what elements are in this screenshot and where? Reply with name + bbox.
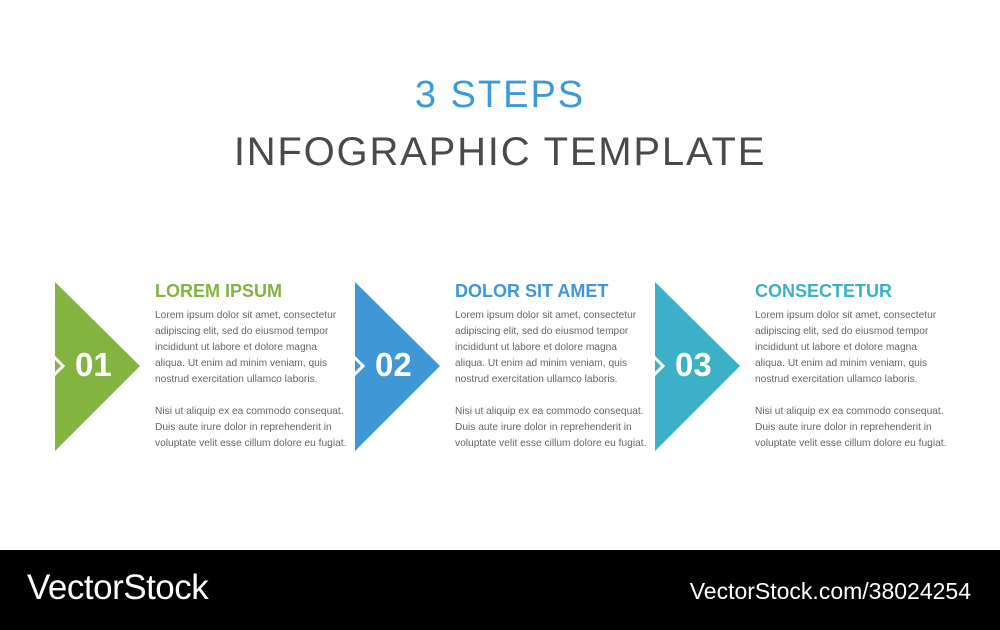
- number: 03: [675, 346, 712, 383]
- text: Duis aute irure dolor in reprehenderit in: [455, 422, 632, 433]
- footer url: VectorStock.com/38024254: [690, 578, 971, 604]
- text: incididunt ut labore et dolore magna: [755, 342, 917, 353]
- text: Duis aute irure dolor in reprehenderit in: [155, 422, 332, 433]
- icon: blue triangle arrow: [355, 282, 440, 451]
- step 3: [655, 281, 946, 451]
- title: 3 STEPS: [415, 74, 585, 116]
- subtitle: INFOGRAPHIC TEMPLATE: [234, 130, 766, 174]
- text: Lorem ipsum dolor sit amet, consectetur: [455, 310, 636, 321]
- text: aliqua. Ut enim ad minim veniam, quis: [455, 358, 627, 369]
- text: aliqua. Ut enim ad minim veniam, quis: [755, 358, 927, 369]
- text: adipiscing elit, sed do eiusmod tempor: [455, 326, 628, 337]
- text: Nisi ut aliquip ex ea commodo consequat.: [755, 406, 944, 417]
- step 1: [55, 281, 346, 451]
- text: voluptate velit esse cillum dolore eu fugiat.: [755, 438, 946, 449]
- text: Duis aute irure dolor in reprehenderit in: [755, 422, 932, 433]
- footer logo: VectorStock: [27, 568, 208, 607]
- text: adipiscing elit, sed do eiusmod tempor: [755, 326, 928, 337]
- text: [155, 310, 346, 449]
- text: incididunt ut labore et dolore magna: [155, 342, 317, 353]
- text: Nisi ut aliquip ex ea commodo consequat.: [155, 406, 344, 417]
- footer bar: [0, 550, 1000, 630]
- text: nostrud exercitation ullamco laboris.: [155, 374, 318, 385]
- text: aliqua. Ut enim ad minim veniam, quis: [155, 358, 327, 369]
- heading: CONSECTETUR: [755, 281, 892, 301]
- text: Lorem ipsum dolor sit amet, consectetur: [155, 310, 336, 321]
- text: incididunt ut labore et dolore magna: [455, 342, 617, 353]
- icon: teal triangle arrow: [655, 282, 740, 451]
- icon: green triangle arrow: [55, 282, 140, 451]
- text: [755, 310, 946, 449]
- step 2: [355, 281, 646, 451]
- text: nostrud exercitation ullamco laboris.: [755, 374, 918, 385]
- number: 01: [75, 346, 112, 383]
- heading: LOREM IPSUM: [155, 281, 282, 301]
- text: nostrud exercitation ullamco laboris.: [455, 374, 618, 385]
- text: voluptate velit esse cillum dolore eu fugiat.: [455, 438, 646, 449]
- text: voluptate velit esse cillum dolore eu fugiat.: [155, 438, 346, 449]
- heading: DOLOR SIT AMET: [455, 281, 608, 301]
- text: adipiscing elit, sed do eiusmod tempor: [155, 326, 328, 337]
- text: [455, 310, 646, 449]
- text: Nisi ut aliquip ex ea commodo consequat.: [455, 406, 644, 417]
- text: Lorem ipsum dolor sit amet, consectetur: [755, 310, 936, 321]
- number: 02: [375, 346, 412, 383]
